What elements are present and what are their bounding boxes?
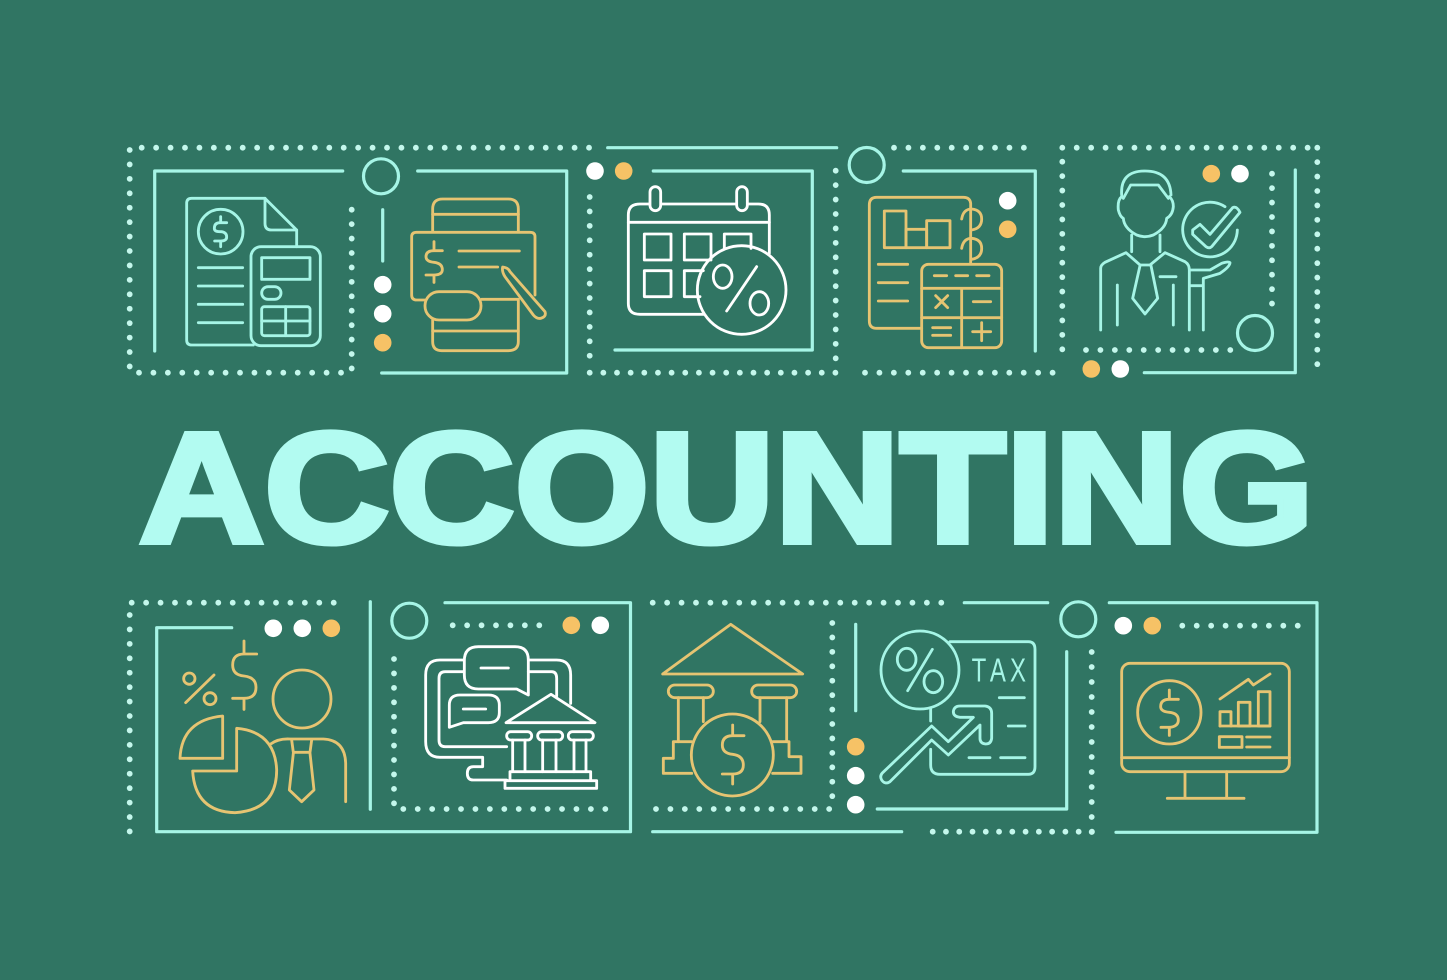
round dots top row (374, 162, 1249, 378)
icon: invoice document with calculator (187, 198, 320, 346)
title: ACCOUNTING (139, 401, 1314, 576)
icon: monitor with dollar and bar chart (1122, 663, 1289, 798)
icon: bank with dollar coin (663, 624, 803, 796)
icon: tax form with rising arrow (881, 631, 1035, 783)
ring markers top row (364, 148, 1272, 350)
icon: online banking monitor (426, 647, 597, 788)
label: TAX: TAX (972, 653, 1026, 690)
icon: calendar with percent badge (628, 187, 786, 334)
icon: notebook with calculator (869, 197, 1002, 348)
icon: analyst with pie chart (180, 641, 346, 813)
icon: accountant with checkmark (1101, 171, 1240, 330)
panel: bottom row frames and dots (130, 602, 1317, 833)
icon: mobile cheque with pen (412, 199, 545, 351)
solid line frames top row (155, 148, 1295, 373)
dotted frames top row (130, 148, 1318, 373)
round dots bottom row (264, 616, 1161, 814)
solid line frames bottom row (157, 602, 1317, 832)
dotted frames bottom row (130, 603, 1299, 833)
panel: top row frames and dots (130, 148, 1318, 378)
ring markers bottom row (392, 602, 1096, 638)
